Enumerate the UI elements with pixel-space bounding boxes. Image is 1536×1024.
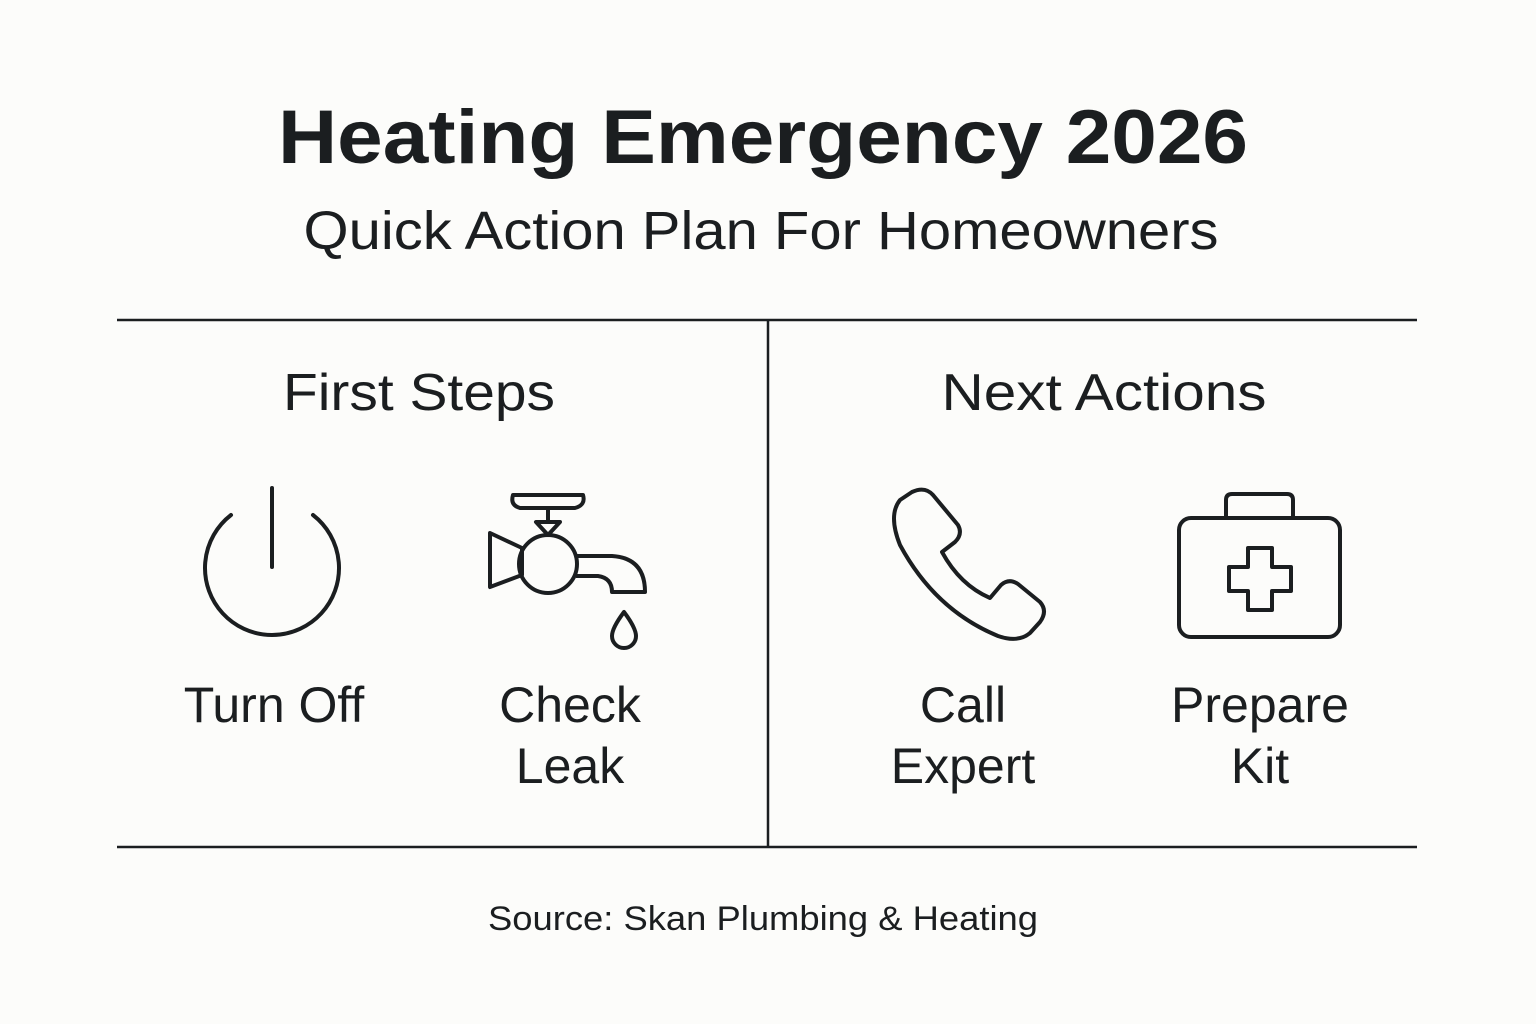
label: Prepare Kit: Prepare: [1171, 677, 1349, 733]
source: Source: Skan Plumbing & Heating: [488, 900, 1038, 938]
icon: power: [205, 488, 339, 635]
label: Turn Off: Turn Off: [184, 677, 364, 733]
label: Call Expert: Call: [920, 677, 1006, 733]
icon: faucet with drop: [490, 495, 645, 648]
panel: next actions: [891, 364, 1349, 794]
heading: Next Actions: Next Actions: [942, 364, 1266, 422]
heading: First Steps: First Steps: [283, 364, 555, 422]
icon: first aid kit: [1179, 494, 1340, 637]
panel: first steps: [184, 364, 645, 794]
icon: phone: [894, 490, 1044, 639]
label: Prepare Kit: Kit: [1231, 738, 1289, 794]
title: Heating Emergency 2026: [278, 95, 1248, 180]
label: Check Leak: Check: [499, 677, 642, 733]
label: Call Expert: Expert: [891, 738, 1035, 794]
subtitle: Quick Action Plan For Homeowners: [304, 201, 1218, 261]
label: Check Leak: Leak: [516, 738, 625, 794]
